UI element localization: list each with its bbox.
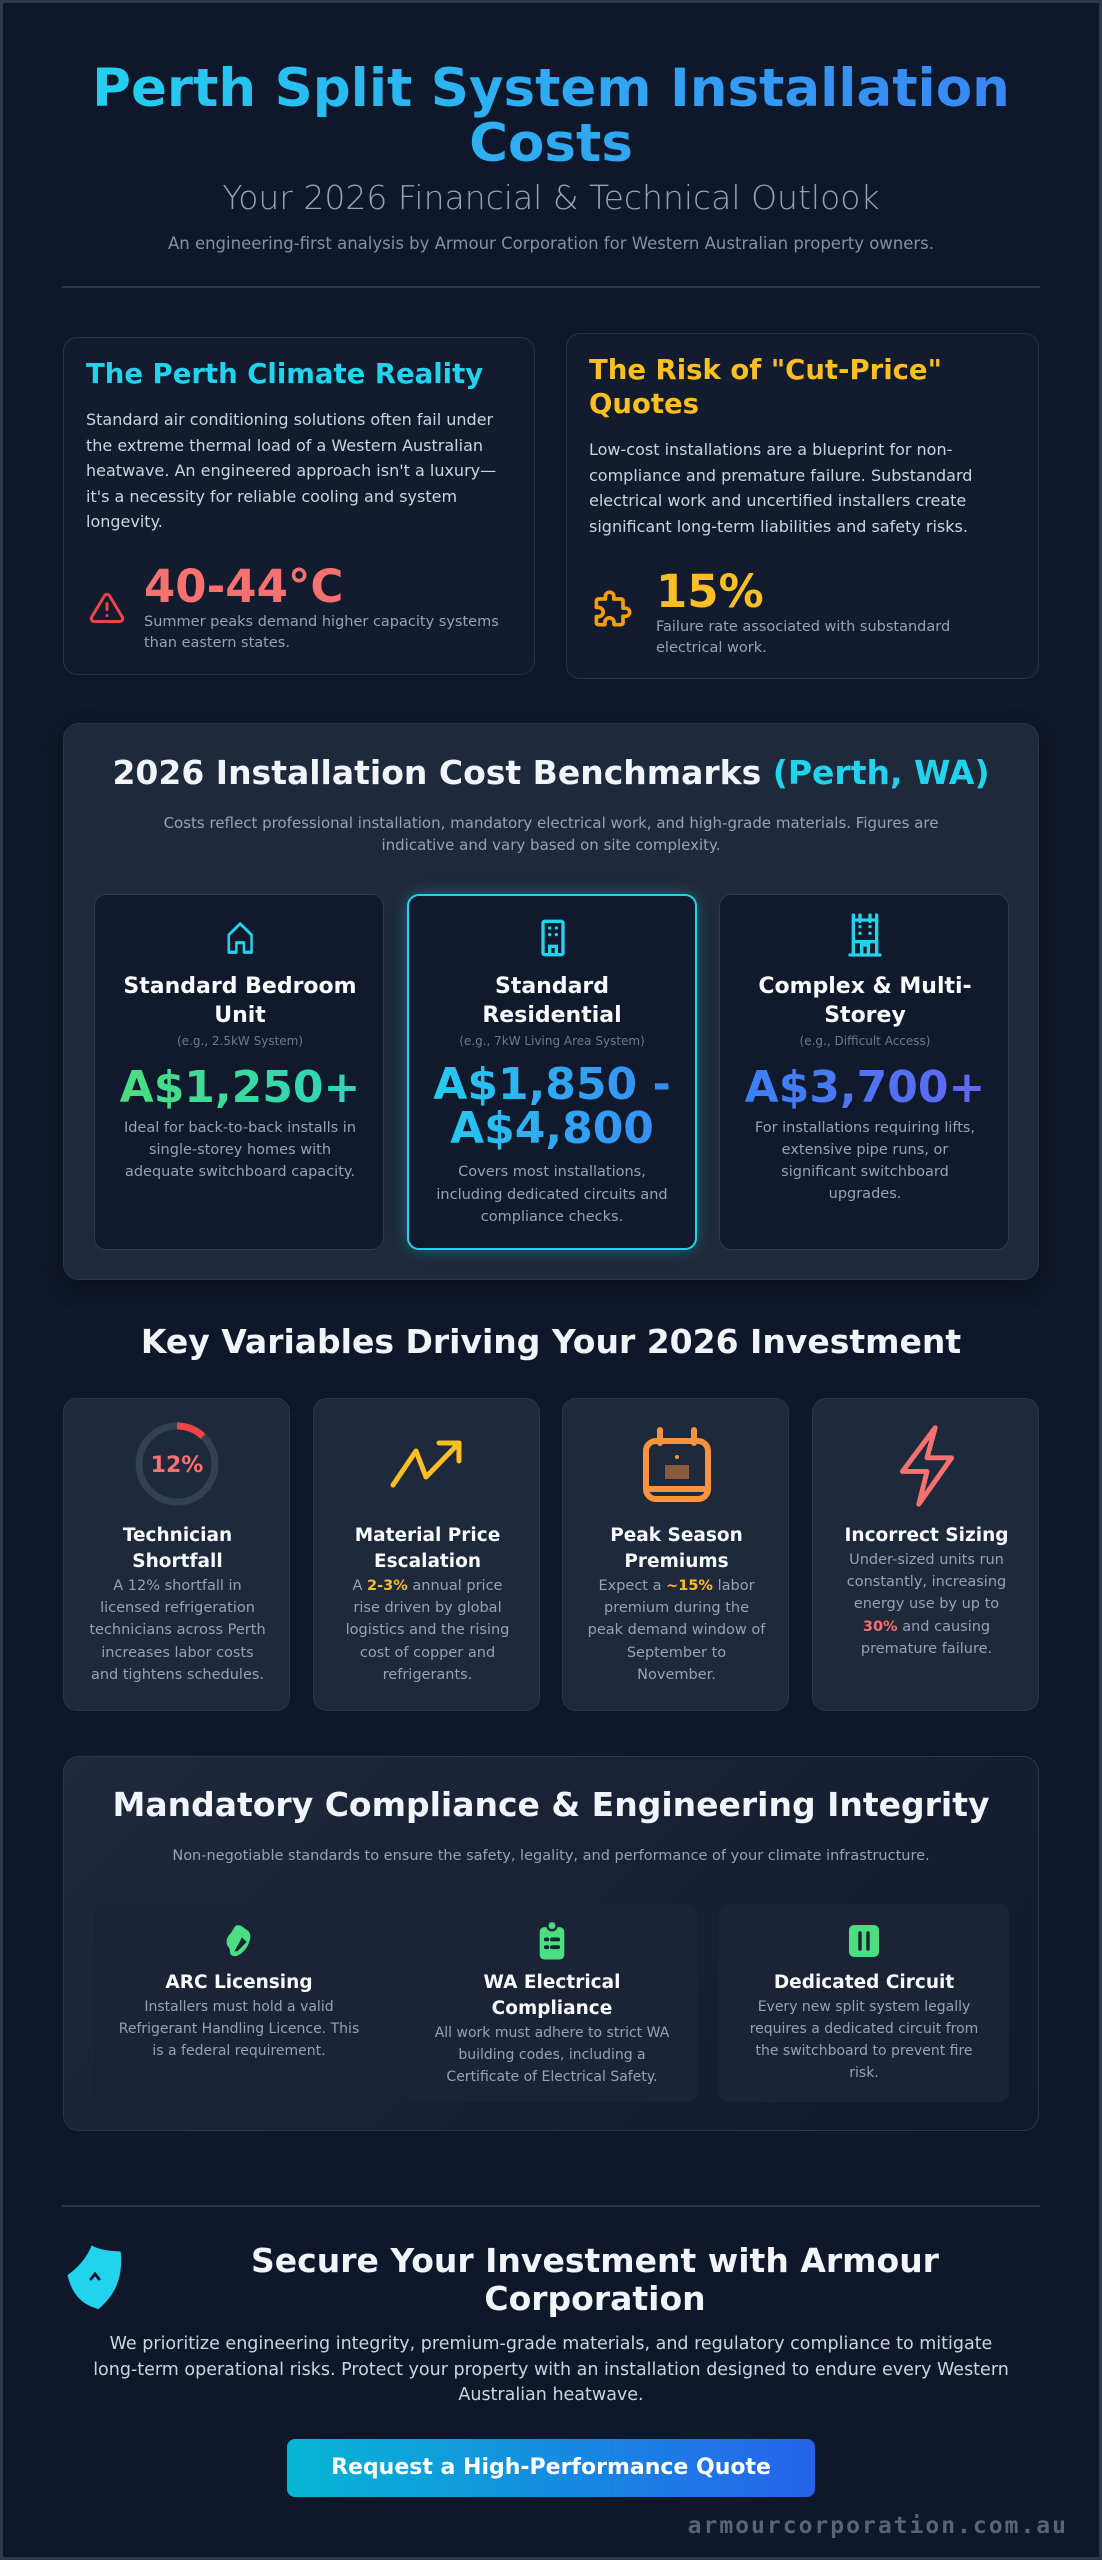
card: ARC licensing <box>94 1904 384 2102</box>
icon: calendar <box>643 1427 711 1502</box>
icon: tower <box>848 913 882 957</box>
text: material: Escalation <box>374 1551 481 1572</box>
text: technician: A 12% shortfall in licensed refrigeration technicians across Perth increases labor costs and tightens schedules. <box>89 1578 266 1683</box>
stat: temperature: Summer peaks demand higher capacity systems than eastern states. <box>144 614 499 651</box>
price: residential: A$4,800 <box>450 1103 654 1154</box>
panel: compliance <box>63 1756 1039 2131</box>
icon: trend arrow <box>390 1440 462 1488</box>
heading: secure investment: Secure Your Investment with Armour Corporation <box>251 2241 939 2318</box>
icon: house <box>228 922 253 954</box>
subtitle: Your 2026 Financial & Technical Outlook <box>222 178 880 217</box>
heading: compliance: Mandatory Compliance & Engineering Integrity <box>112 1785 990 1824</box>
text: closing paragraph: We prioritize engineering integrity, premium-grade materials, and regulatory compliance to mitigate long-term operational risks. Protect your property with an installation designed to endure every Western Australian heatwave. <box>93 2334 1009 2405</box>
text: material: Material Price <box>355 1525 500 1546</box>
text: WA electrical <box>434 1972 670 2085</box>
card: WA electrical <box>407 1904 697 2102</box>
text: material: A 2-3% annual price rise driven by global logistics and the rising cost of copper and refrigerants. <box>346 1578 509 1683</box>
price: complex: A$3,700+ <box>745 1062 985 1113</box>
card: complex multi-storey: For installations requiring lifts, extensive pipe runs, or significant switchboard upgrades. <box>755 1120 975 1202</box>
card: standard residential: Covers most installations, including dedicated circuits and compliance checks. <box>436 1164 668 1225</box>
icon: clipboard <box>540 1922 564 1960</box>
chart: 12% ring: 12% <box>151 1453 203 1478</box>
icon: building <box>541 920 565 956</box>
text: dedicated: Every new split system legally requires a dedicated circuit from the switchboard to prevent fire risk. <box>750 1999 978 2081</box>
tagline: An engineering-first analysis by Armour Corporation for Western Australian property owners. <box>168 234 934 253</box>
title <box>40 61 1062 171</box>
footer: website: armourcorporation.com.au <box>688 2513 1068 2539</box>
stat: failure rate: Failure rate associated with substandard electrical work. <box>656 619 950 656</box>
text: climate body: Standard air conditioning solutions often fail under the extreme thermal load of a Western Australian heatwave. An engineered approach isn't a luxury—it's a necessity for reliable cooling and system longevity. <box>86 410 496 531</box>
stat: failure rate <box>656 565 950 656</box>
button: request quote: Request a High-Performance Quote <box>331 2455 771 2480</box>
text: compliance note: Non-negotiable standards to ensure the safety, legality, and performance of your climate infrastructure. <box>172 1848 930 1864</box>
text: WA electrical: All work must adhere to strict WA building codes, including a Certificate of Electrical Safety. <box>435 2025 669 2085</box>
text: technician: Shortfall <box>132 1551 223 1572</box>
card: standard residential <box>407 894 697 1250</box>
card: technician shortfall <box>63 1398 290 1711</box>
card: bedroom unit: Ideal for back-to-back installs in single-storey homes with adequate switchboard capacity. <box>124 1120 356 1180</box>
text: sizing: Incorrect Sizing <box>845 1525 1008 1546</box>
card: dedicated circuit <box>719 1904 1009 2102</box>
icon: ARC <box>226 1925 250 1956</box>
icon: warning <box>90 592 124 623</box>
text: peak <box>588 1525 766 1683</box>
stat: failure rate: 15% <box>656 565 764 618</box>
card: incorrect sizing <box>812 1398 1039 1711</box>
card: standard residential: (e.g., 7kW Living Area System) <box>459 1034 645 1048</box>
text: residential title: Standard Residential <box>482 974 622 1028</box>
button: request quote <box>287 2439 815 2497</box>
stat: temperature <box>144 560 499 651</box>
card: bedroom unit <box>94 894 384 1250</box>
text: risk body: Low-cost installations are a blueprint for non-compliance and premature failure. Substandard electrical work and uncertified installers create significant long-term liabilities and safety risks. <box>589 440 972 536</box>
text: ARC: ARC Licensing <box>165 1972 313 1993</box>
heading: benchmarks: 2026 Installation Cost Benchmarks (Perth, WA) <box>112 753 990 792</box>
heading: climate: The Perth Climate Reality <box>86 358 483 390</box>
text: sizing: Under-sized units run constantly, increasing energy use by up to 30% and causing premature failure. <box>847 1552 1006 1657</box>
title: Costs <box>469 113 633 174</box>
text: technician: Technician <box>123 1525 232 1546</box>
text: material <box>346 1525 509 1683</box>
icon: puzzle <box>594 590 632 626</box>
price: residential: A$1,850 - <box>433 1059 671 1110</box>
card: bedroom unit: (e.g., 2.5kW System) <box>177 1034 303 1048</box>
text: WA electrical: WA Electrical Compliance <box>484 1972 620 2019</box>
title: Perth Split System Installation <box>92 58 1010 119</box>
panel: cost benchmarks <box>63 723 1039 1280</box>
text: peak: Premiums <box>624 1551 729 1572</box>
panel: cut-price risk <box>566 333 1039 679</box>
text: technician <box>89 1525 266 1683</box>
stat: temperature: 40-44°C <box>144 560 343 613</box>
text: dedicated: Dedicated Circuit <box>774 1972 954 1993</box>
heading: key variables: Key Variables Driving Your 2026 Investment <box>141 1322 961 1361</box>
card: complex multi-storey <box>719 894 1009 1250</box>
price: residential <box>409 1063 695 1151</box>
card: material price <box>313 1398 540 1711</box>
chart: 12% ring <box>136 1422 218 1506</box>
text: complex title: Complex & Multi-Storey <box>758 974 972 1028</box>
card: peak season <box>562 1398 789 1711</box>
text: ARC: Installers must hold a valid Refrigerant Handling Licence. This is a federal requirement. <box>119 1999 359 2059</box>
price: bedroom: A$1,250+ <box>120 1062 360 1113</box>
panel: climate reality <box>63 337 535 675</box>
icon: lightning <box>900 1425 954 1507</box>
icon: shield logo <box>68 2246 122 2310</box>
text: benchmarks note: Costs reflect professional installation, mandatory electrical work, and high-grade materials. Figures are indicative and vary based on site complexity. <box>164 814 938 854</box>
card: complex multi-storey: (e.g., Difficult Access) <box>800 1034 930 1048</box>
icon: circuit <box>849 1925 879 1957</box>
text: peak: Peak Season <box>610 1525 743 1546</box>
text: ARC <box>119 1972 359 2059</box>
text: bedroom title: Standard Bedroom Unit <box>123 974 357 1028</box>
heading: risk: The Risk of "Cut-Price" Quotes <box>589 354 942 420</box>
text: peak: Expect a ~15% labor premium during the peak demand window of September to November. <box>588 1578 765 1683</box>
